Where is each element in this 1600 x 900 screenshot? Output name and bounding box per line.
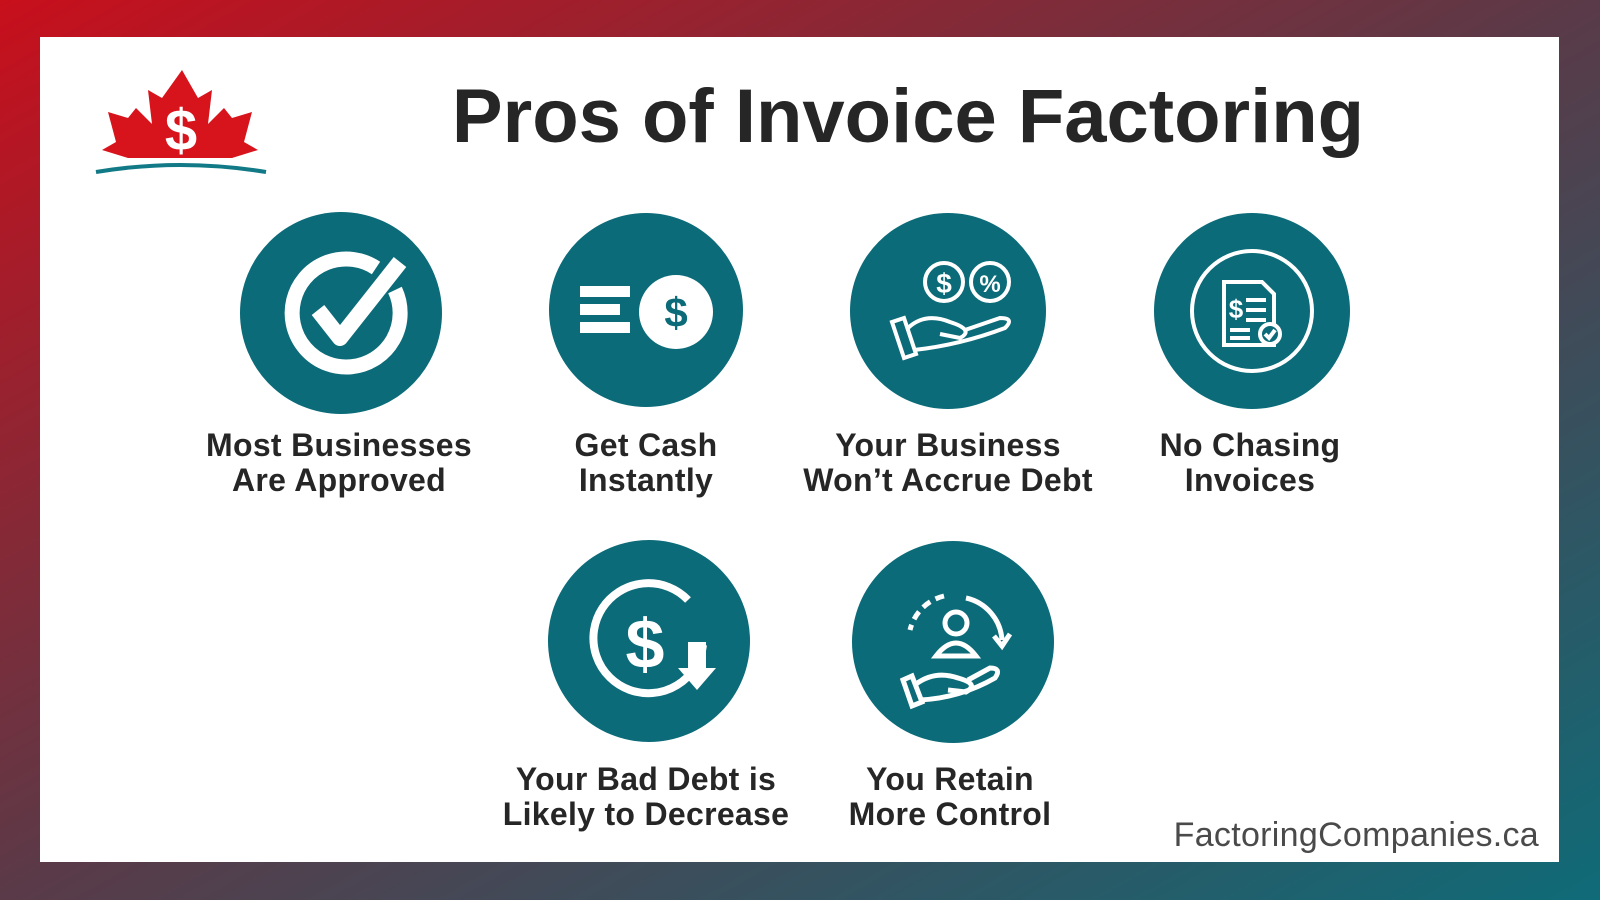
item 6: retain control: More Control xyxy=(849,796,1051,832)
item 5: bad debt decreases xyxy=(503,540,789,832)
item 3: no debt: $ xyxy=(936,268,952,299)
item 4: no chasing invoices xyxy=(1154,213,1350,498)
footer website: FactoringCompanies.ca xyxy=(1174,816,1539,854)
item 2: cash instantly: Get Cash xyxy=(575,427,717,463)
item 6: retain control: You Retain xyxy=(866,761,1034,797)
title: Pros of Invoice Factoring xyxy=(452,74,1364,159)
item 1: approved: Are Approved xyxy=(232,462,446,498)
item 2: cash instantly xyxy=(549,213,743,498)
logo: maple leaf with dollar xyxy=(96,70,266,172)
item 3: no debt xyxy=(803,213,1093,498)
item 6: retain control xyxy=(849,541,1054,832)
logo: maple leaf with dollar: $ xyxy=(165,98,197,163)
item 2: cash instantly: Instantly xyxy=(579,462,713,498)
item 5: bad debt decreases: Your Bad Debt is xyxy=(516,761,776,797)
item 1: approved xyxy=(206,212,472,498)
item 2: cash instantly: $ xyxy=(664,289,688,336)
item 1: approved: Most Businesses xyxy=(206,427,472,463)
item 4: no chasing invoices: No Chasing xyxy=(1160,427,1340,463)
item 4: no chasing invoices: $ xyxy=(1229,294,1244,324)
item 5: bad debt decreases: Likely to Decrease xyxy=(503,796,789,832)
item 3: no debt: Your Business xyxy=(835,427,1061,463)
item 3: no debt: Won’t Accrue Debt xyxy=(803,462,1093,498)
item 3: no debt: % xyxy=(979,271,1001,298)
item 5: bad debt decreases: $ xyxy=(626,605,664,683)
item 4: no chasing invoices: Invoices xyxy=(1185,462,1315,498)
